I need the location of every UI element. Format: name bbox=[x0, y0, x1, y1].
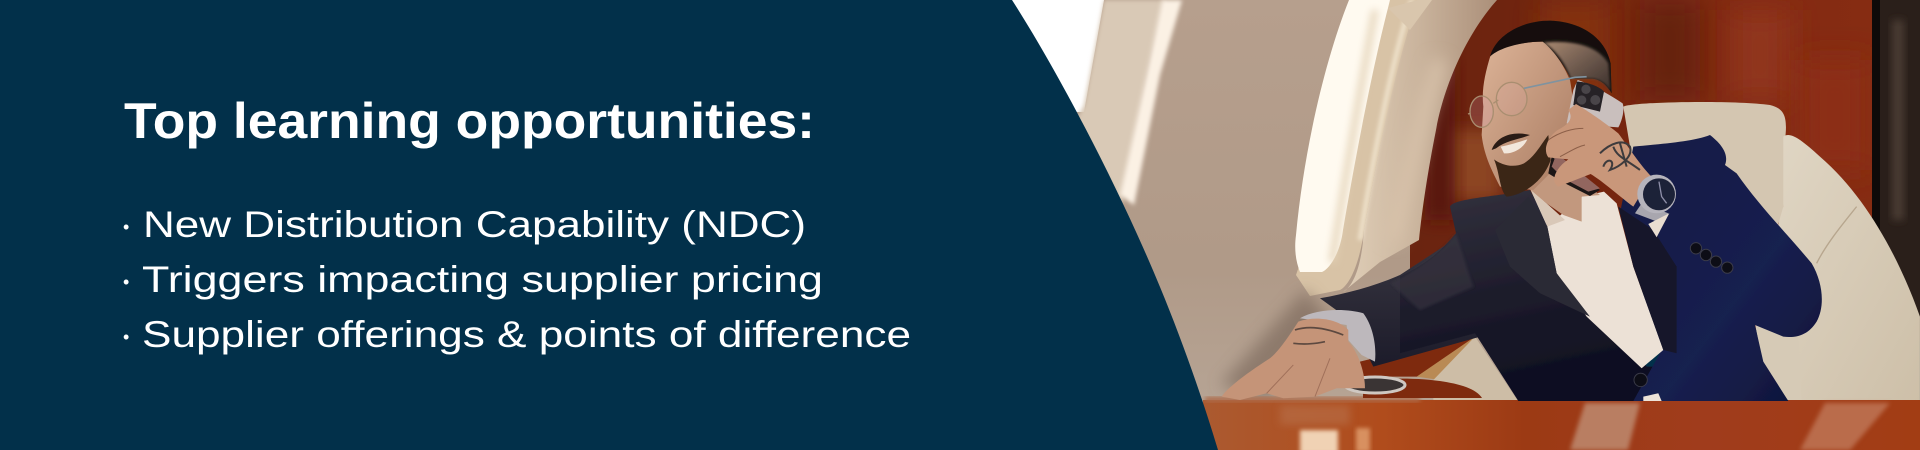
man bbox=[1390, 21, 1822, 401]
navy curved panel bbox=[0, 0, 1218, 450]
shadow behind hand bbox=[1220, 290, 1330, 400]
seat bbox=[1623, 102, 1920, 402]
face bbox=[1482, 42, 1573, 190]
table bbox=[1203, 377, 1920, 450]
cabin wall bbox=[1000, 0, 1520, 450]
lapel right bbox=[1618, 207, 1677, 353]
armrest and seat base bbox=[1360, 333, 1518, 402]
photo: man phoning in a private jet cabin bbox=[1000, 0, 1920, 450]
forearm sleeve bbox=[1320, 233, 1540, 367]
wrist and fingers bbox=[1222, 319, 1365, 400]
title: Top learning opportunities: bbox=[124, 93, 815, 149]
bullet item 2: Triggers impacting supplier pricing bbox=[142, 259, 823, 300]
lapel left bbox=[1495, 197, 1590, 317]
hand on table bbox=[1222, 310, 1375, 400]
shirt bbox=[1530, 188, 1663, 368]
bullet list bbox=[123, 204, 911, 355]
beard bbox=[1494, 135, 1551, 197]
smile bbox=[1501, 139, 1527, 153]
cuff bbox=[1300, 310, 1375, 362]
glasses bbox=[1468, 77, 1587, 127]
hand on phone bbox=[1546, 104, 1652, 207]
hair bbox=[1490, 21, 1612, 93]
wood wall panel bbox=[1410, 0, 1882, 330]
jacket bbox=[1400, 190, 1788, 401]
jacket buttons bbox=[1634, 243, 1733, 387]
mustache bbox=[1492, 134, 1530, 150]
bullet marker 2: • bbox=[123, 272, 129, 292]
fuselage panel with window bbox=[1295, 0, 1497, 296]
neck bbox=[1527, 157, 1600, 222]
bullet marker 1: • bbox=[123, 217, 129, 237]
watch bbox=[1635, 175, 1676, 223]
shirt cuff bbox=[1648, 213, 1669, 237]
upper arm sheen bbox=[1390, 233, 1473, 310]
tattoo bbox=[1600, 142, 1640, 170]
right jacket side and sleeve bbox=[1620, 135, 1822, 401]
bullet item 1: New Distribution Capability (NDC) bbox=[143, 204, 806, 245]
phone bbox=[1567, 80, 1623, 127]
bullet marker 3: • bbox=[123, 327, 129, 347]
dark strip at right edge bbox=[1872, 0, 1920, 340]
bullet item 3: Supplier offerings & points of difference bbox=[142, 314, 911, 355]
